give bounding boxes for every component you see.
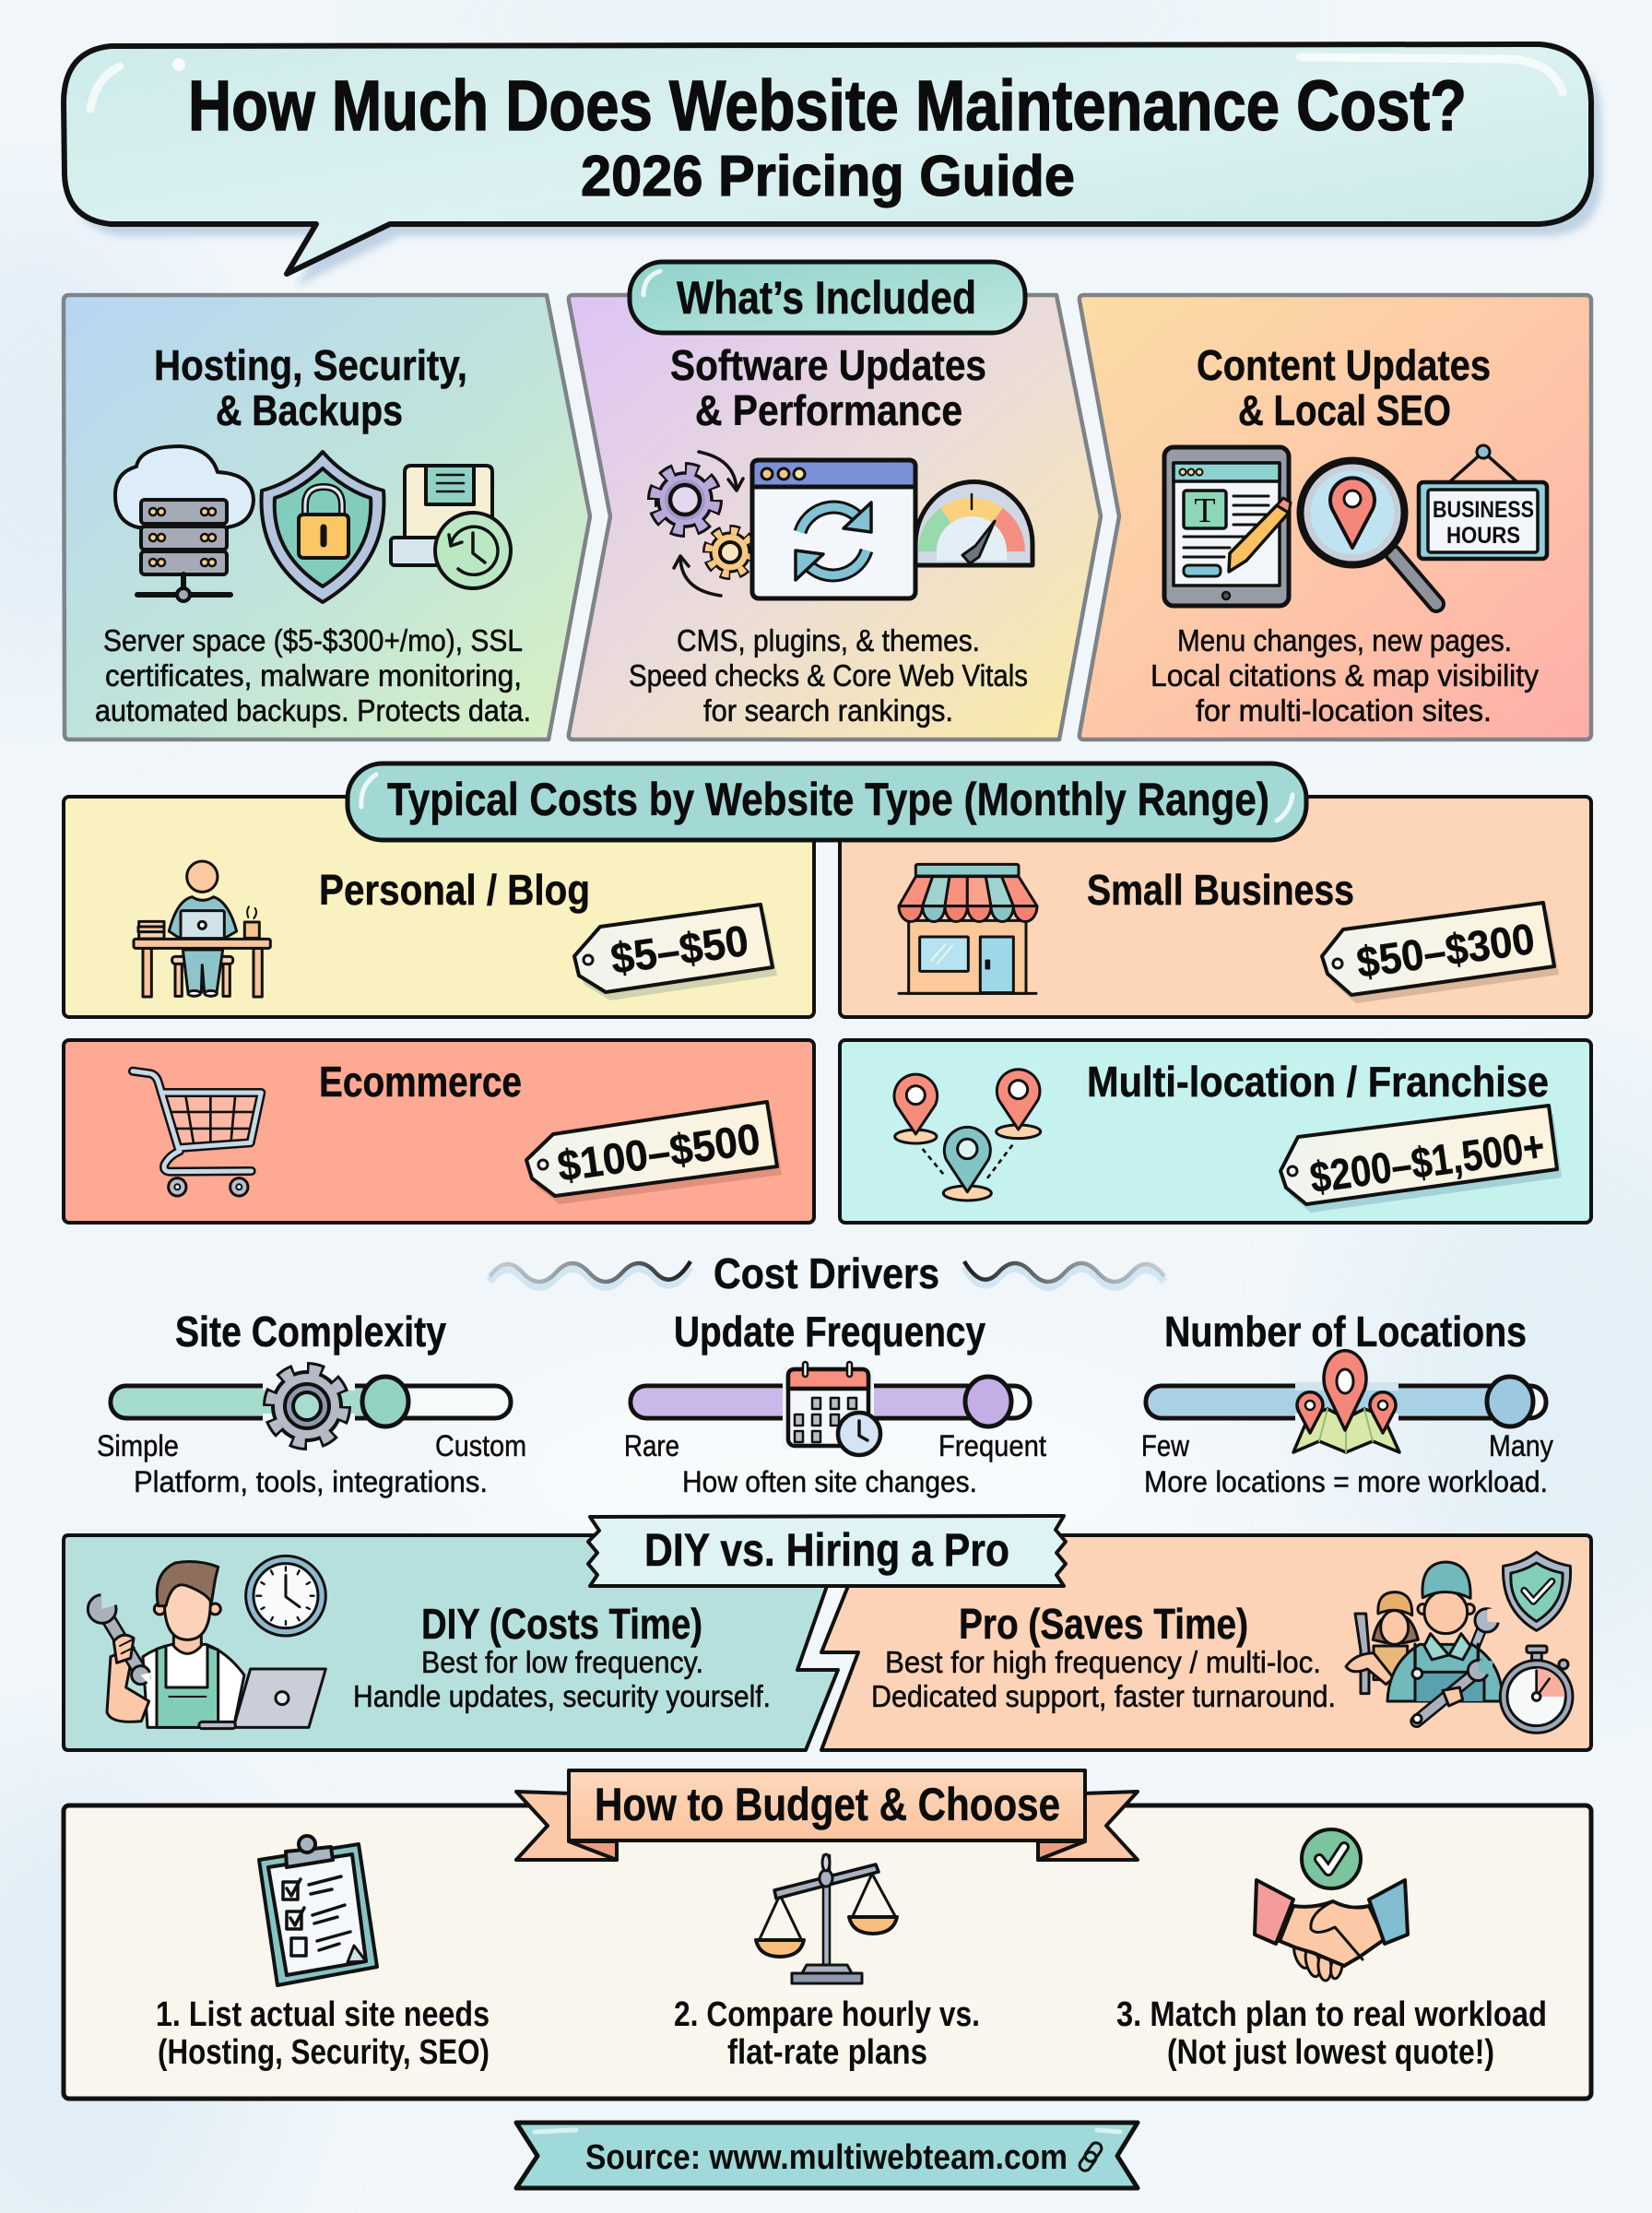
icon: link [1078,2141,1103,2172]
title speech bubble [64,44,1601,286]
step 2 text: flat-rate plans [727,2033,927,2072]
panel: how to budget and choose [64,1805,1591,2099]
driver: number of locations [1141,1308,1553,1498]
icon: business hours sign: HOURS [1446,523,1520,549]
panel heading: & Backups [216,386,403,434]
driver heading: Site Complexity [175,1308,446,1355]
icon: tablet with pencil [1164,447,1291,606]
panel: hosting, security and backups [64,295,590,740]
step 3 text [1116,1995,1547,2072]
panel heading: Software Updates [670,341,986,389]
price tag: $5–$50 [608,916,751,983]
icon: clipboard checklist [259,1836,377,1985]
scale labels: Frequent [938,1429,1046,1462]
DIY text: DIY (Costs Time) [421,1600,702,1648]
panel body text: Menu changes, new pages. [1177,623,1512,657]
section heading: cost drivers: Cost Drivers [714,1249,939,1297]
scale labels [1141,1429,1553,1462]
panel: pro [821,1535,1591,1750]
step 2 text [674,1995,980,2072]
scale labels [624,1429,1046,1462]
section ribbon: DIY vs. hiring a pro: DIY vs. Hiring a Pro [644,1524,1009,1576]
title text: 2026 Pricing Guide [581,145,1075,208]
card: small business [840,797,1591,1017]
panel body text: Server space ($5-$300+/mo), SSL [103,623,523,657]
icon: balance scale [756,1854,897,1983]
slider with gear [111,1368,511,1444]
panel: DIY [64,1535,885,1750]
scale labels: Rare [624,1429,679,1462]
icon: storefront [899,864,1037,993]
scale labels [97,1429,526,1462]
panel body text: Speed checks & Core Web Vitals [629,658,1028,692]
title text [188,66,1467,208]
source banner [516,2123,1138,2188]
icon: magnifier with map pin [1302,462,1436,604]
panel body text [1150,623,1539,728]
panel body text: CMS, plugins, & themes. [677,623,980,657]
price tag: $50–$300 [1353,914,1538,987]
step 1 text: (Hosting, Security, SEO) [158,2033,490,2072]
panel heading: Hosting, Security, [154,341,467,389]
driver description: More locations = more workload. [1144,1465,1548,1498]
panel body text: for search rankings. [703,693,953,728]
step 3 text: 3. Match plan to real workload [1116,1995,1547,2034]
panel heading [154,341,467,434]
driver heading: Number of Locations [1164,1308,1527,1355]
slider with map pins [1146,1351,1546,1452]
source banner: Source: www.multiwebteam.com [585,2138,1068,2177]
step 3 text: (Not just lowest quote!) [1167,2033,1494,2072]
slider with calendar [631,1362,1030,1455]
price tag [574,905,777,1000]
panel heading: Content Updates [1197,341,1491,389]
icon: shopping cart [133,1071,261,1196]
price tag [1280,1106,1562,1213]
panel body text: automated backups. Protects data. [95,693,531,728]
step 2 text: 2. Compare hourly vs. [674,1995,980,2034]
price tag: $100–$500 [554,1114,763,1190]
section pill: what's included: What’s Included [677,272,976,324]
scale labels: Many [1489,1429,1553,1462]
section heading: cost drivers [490,1249,1164,1297]
icon: shield with padlock [262,452,384,602]
panel body text: for multi-location sites. [1196,693,1492,728]
DIY text: Handle updates, security yourself. [353,1679,771,1713]
step 1 text: 1. List actual site needs [156,1995,490,2034]
section pill: what's included [630,262,1025,333]
icon: cloud server [115,446,254,601]
panel: content updates and local SEO [1080,295,1591,740]
icon: gears with cycle arrows [655,452,752,596]
icon: browser window with refresh arrows [752,460,915,598]
icon: tablet with pencil: T [1194,491,1216,530]
driver: site complexity [97,1308,526,1498]
icon: handshake with check badge [1255,1829,1408,1981]
price tag [526,1102,782,1204]
card: multi-location / franchise [840,1040,1591,1223]
card heading: Personal / Blog [319,866,590,914]
icon: pro technicians, shield and stopwatch [1346,1552,1573,1733]
icon: three connected map pins [894,1070,1041,1201]
card: ecommerce [64,1040,814,1223]
driver description: Platform, tools, integrations. [134,1465,488,1498]
icon: person at desk [134,861,270,997]
pro text [871,1600,1336,1713]
DIY text: Best for low frequency. [421,1645,703,1679]
panel heading: & Performance [695,386,962,434]
icon: business hours sign [1419,445,1547,559]
panel body text: certificates, malware monitoring, [105,658,522,692]
panel body text [629,623,1028,728]
card: personal / blog [64,797,814,1017]
section banner: how to budget and choose: How to Budget & Choose [595,1779,1060,1830]
card heading: Ecommerce [319,1058,522,1106]
DIY text [353,1600,771,1713]
panel body text: Local citations & map visibility [1150,658,1539,692]
section pill: typical costs [348,763,1306,840]
pro text: Pro (Saves Time) [959,1600,1248,1648]
price tag [1322,903,1559,1003]
step 1 text [156,1995,490,2072]
icon: backup floppy and clock [391,466,511,588]
panel heading [1197,341,1491,434]
card heading: Small Business [1087,866,1354,914]
pro text: Best for high frequency / multi-loc. [885,1645,1321,1679]
panel heading [670,341,986,434]
scale labels: Few [1141,1429,1190,1462]
panel: software updates and performance [569,295,1101,740]
pro text: Dedicated support, faster turnaround. [871,1679,1336,1713]
price tag: $200–$1,500+ [1307,1120,1548,1202]
scale labels: Simple [97,1429,179,1462]
icon: business hours sign: BUSINESS [1433,497,1534,523]
section pill: typical costs: Typical Costs by Website Type (Monthly Range) [387,774,1269,825]
driver description: How often site changes. [682,1465,977,1498]
driver heading: Update Frequency [674,1308,985,1355]
icon: speed gauge [915,482,1032,565]
driver: update frequency [624,1308,1046,1498]
panel heading: & Local SEO [1238,386,1451,434]
scale labels: Custom [435,1429,526,1462]
section banner: how to budget and choose [516,1770,1138,1860]
section ribbon: DIY vs. hiring a pro [588,1516,1066,1586]
card heading: Multi-location / Franchise [1087,1058,1549,1106]
icon: DIY person with wrench, laptop and clock [88,1556,325,1729]
panel body text [95,623,531,728]
